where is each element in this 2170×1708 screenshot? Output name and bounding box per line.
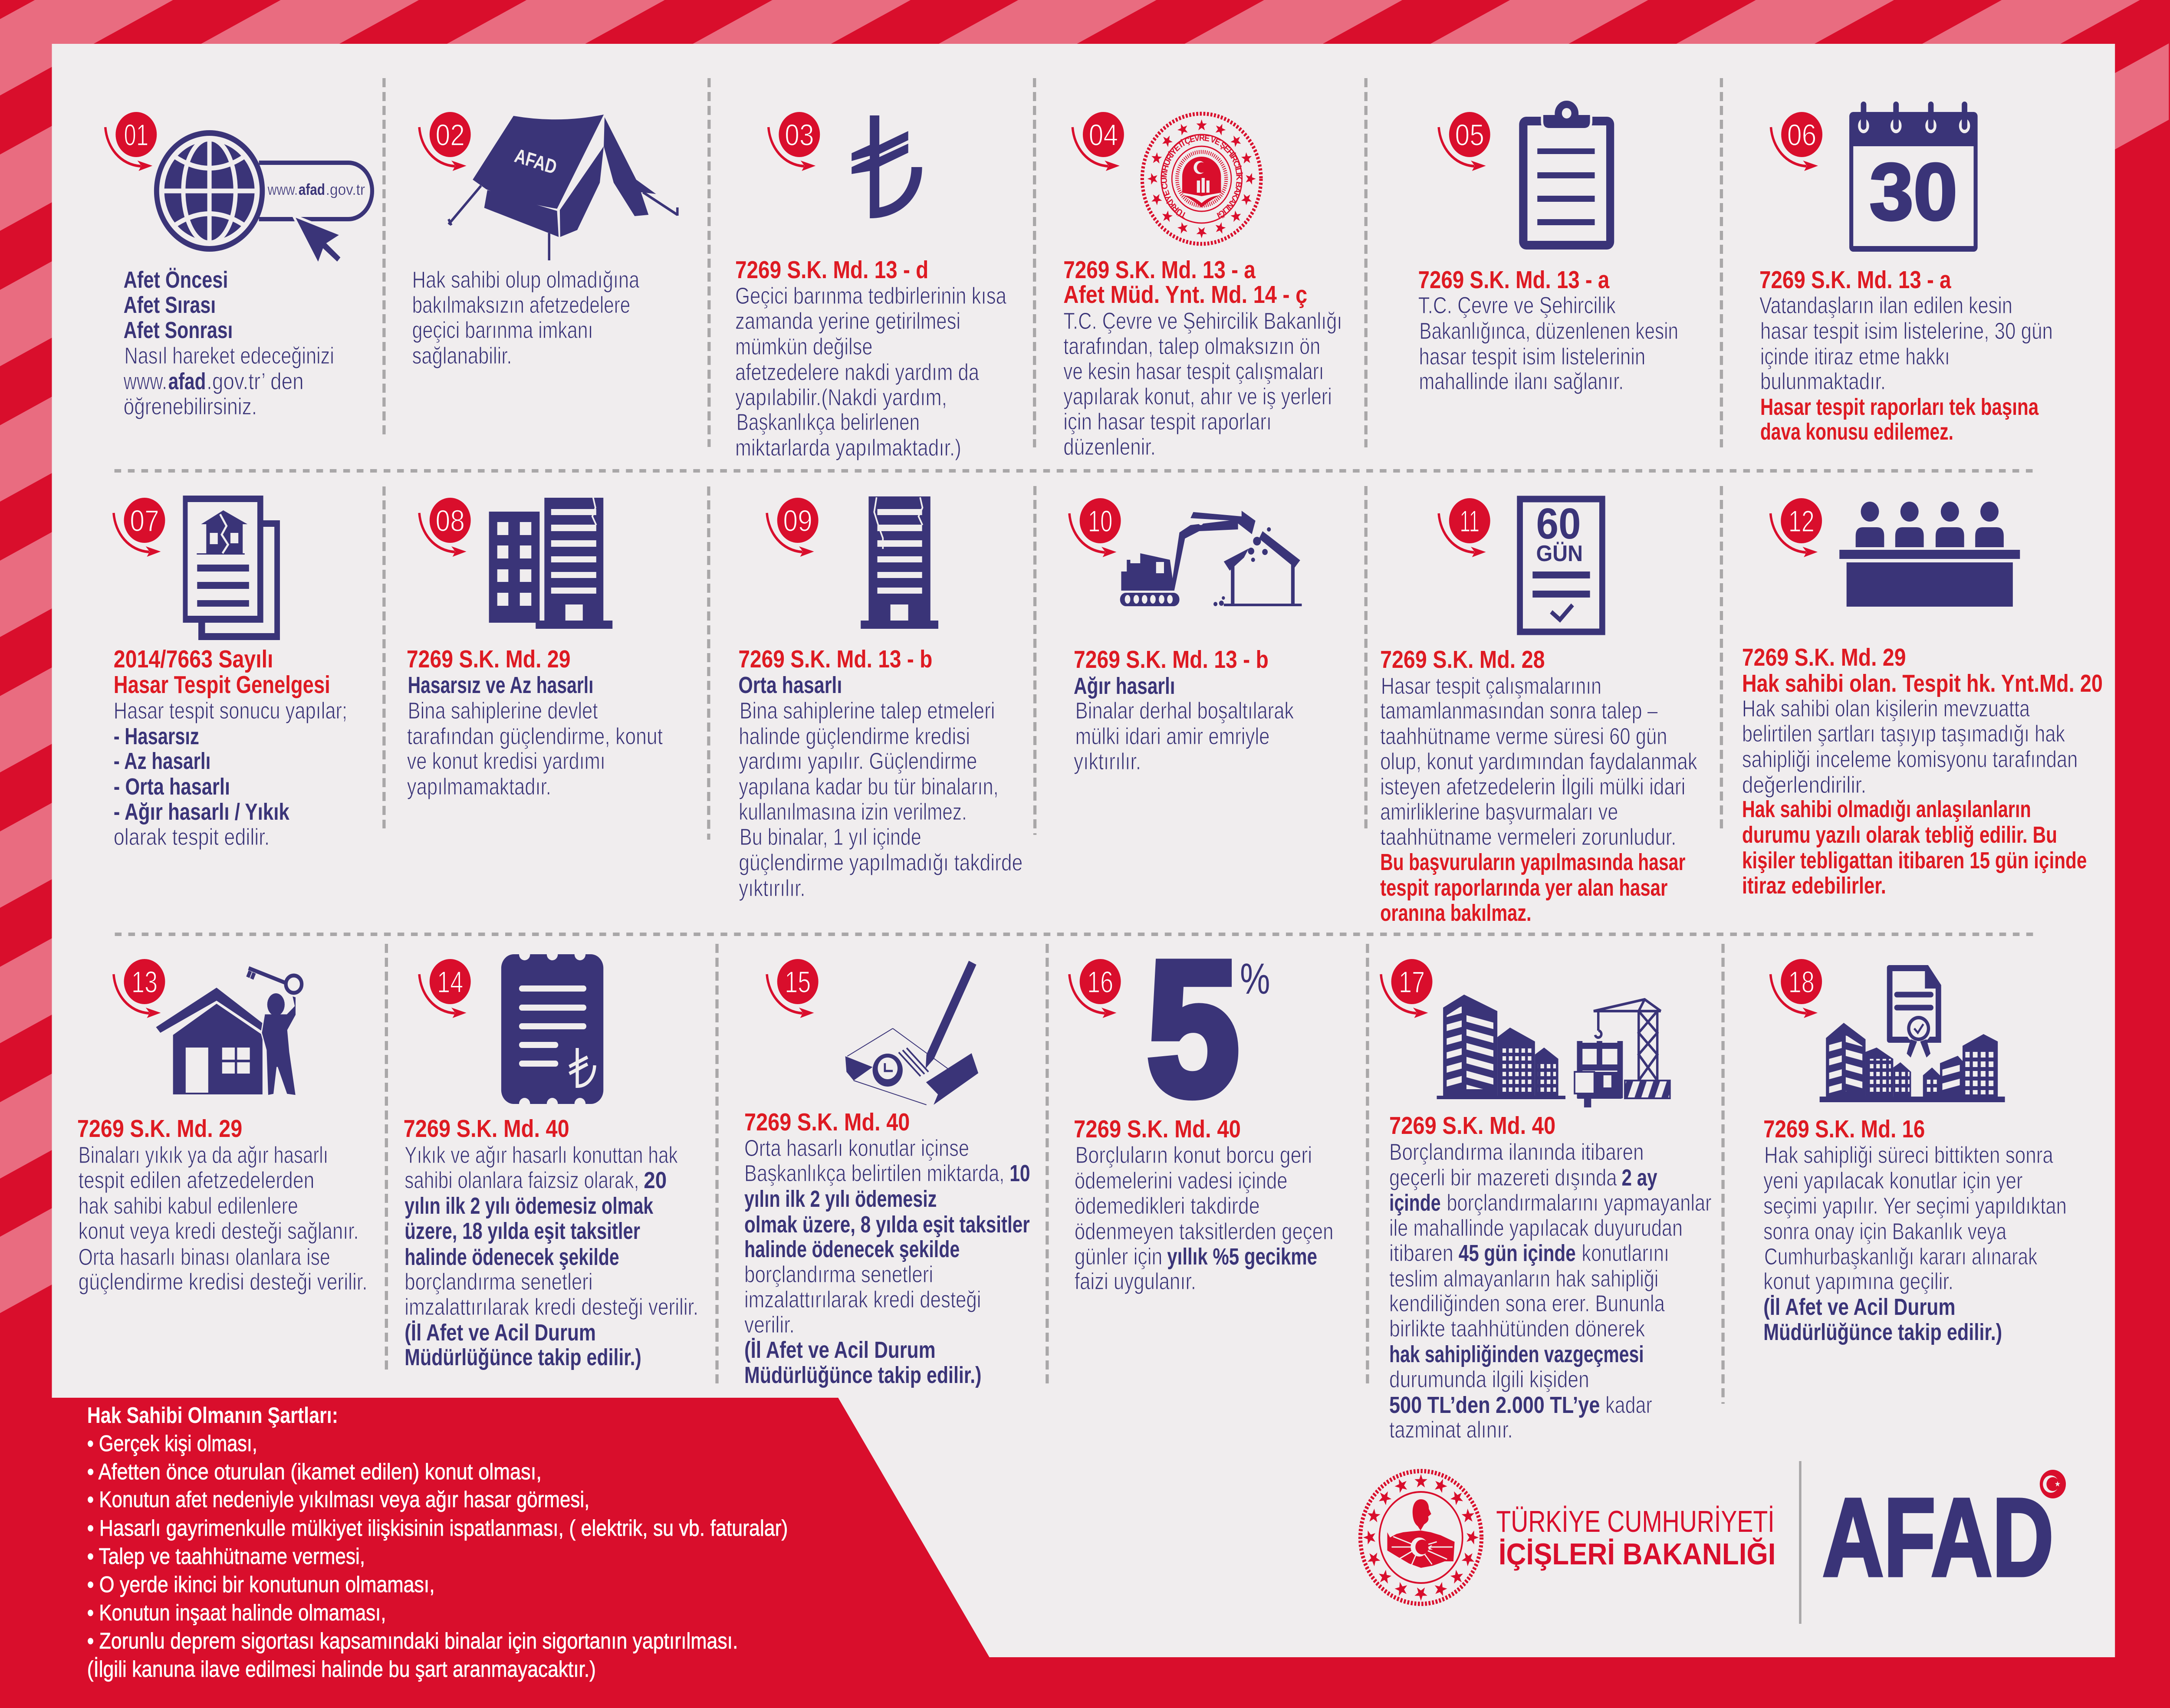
panel 02: temporary shelter — [412, 112, 677, 368]
icon: cracked tower — [861, 496, 938, 629]
text block: kadar — [1605, 1392, 1652, 1418]
text block: hak sahibi kabul edilenlere — [79, 1192, 298, 1219]
icon: approved document over buildings — [1820, 965, 2005, 1102]
text block: faizi uygulanır. — [1075, 1268, 1196, 1294]
text block: sağlanabilir. — [412, 342, 512, 368]
badge 06 — [1771, 112, 1822, 171]
text block: 2 ay — [1622, 1164, 1657, 1190]
text block — [412, 266, 639, 368]
text block: Binaları yıkık ya da ağır hasarlı — [79, 1142, 328, 1168]
text block: yardımı yapılır. Güçlendirme — [739, 748, 977, 774]
text block — [79, 1142, 368, 1294]
text block: miktarlarda yapılmaktadır.) — [735, 434, 961, 460]
panel 08: undamaged and lightly damaged — [407, 496, 663, 799]
text block: Bu binalar, 1 yıl içinde — [740, 824, 921, 850]
text block: hak sahipliğinden vazgeçmesi — [1389, 1341, 1644, 1367]
text block: birlikte taahhütünden dönerek — [1389, 1315, 1645, 1341]
text block: Başkanlıkça belirlenen — [736, 409, 920, 435]
subheading: Orta hasarlı — [738, 672, 842, 698]
icon: clipboard — [1519, 99, 1614, 250]
badge 10 — [1069, 498, 1121, 557]
text block: olmak üzere, 8 yılda eşit taksitler — [744, 1211, 1030, 1237]
badge 03 — [769, 112, 820, 171]
text block: ödenmeyen taksitlerden geçen — [1075, 1218, 1333, 1244]
text block: ile mahallinde yapılacak duyurudan — [1389, 1215, 1683, 1241]
text block: Bina sahiplerine devlet — [408, 697, 598, 723]
conditions list: • Konutun inşaat halinde olmaması, — [87, 1600, 386, 1625]
text block: Müdürlüğünce takip edilir.) — [1763, 1319, 2002, 1345]
heading — [1742, 644, 2103, 697]
text block: (İl Afet ve Acil Durum — [744, 1337, 936, 1363]
icon: 60 days document — [1520, 499, 1602, 632]
text block: yıktırılır. — [739, 875, 806, 901]
text block: Afet Sırası — [124, 292, 216, 318]
text block: Vatandaşların ilan edilen kesin — [1759, 292, 2012, 318]
text block — [1380, 673, 1697, 926]
text block: ödemedikleri takdirde — [1075, 1192, 1260, 1219]
badge 04: 04 — [1089, 118, 1118, 152]
badge 12: 12 — [1789, 504, 1815, 539]
panel 01: AFAD website — [105, 112, 372, 419]
text block: Hak sahibi olmadığı anlaşılanların — [1742, 796, 2031, 822]
text block — [407, 697, 663, 799]
logo text: ministry name: TÜRKİYE CUMHURİYETİ — [1496, 1504, 1775, 1539]
text block: sahibi olanlara faizsiz olarak, — [404, 1167, 639, 1193]
icon: damage report documents — [183, 496, 280, 640]
panel 15: 10 year credit — [744, 959, 1030, 1388]
text block: yılın ilk 2 yılı ödemesiz — [744, 1186, 937, 1212]
icon: buildings and construction crane — [1437, 995, 1670, 1107]
badge 04 — [1072, 112, 1124, 171]
badge 15 — [767, 959, 819, 1018]
badge 08 — [419, 498, 471, 557]
text block: yılın ilk 2 yılı ödemesiz olmak — [404, 1192, 653, 1219]
panel 12: commission evaluation — [1742, 498, 2103, 898]
text block — [735, 282, 1006, 460]
text block — [1389, 1139, 1712, 1442]
heading: 7269 S.K. Md. 40 — [1074, 1115, 1241, 1143]
text block: bakılmaksızın afetzedelere — [412, 292, 630, 318]
logo text: ministry name: İÇİŞLERİ BAKANLIĞI — [1499, 1537, 1775, 1571]
icon: excavator demolishing house — [1120, 511, 1302, 606]
logo: interior ministry seal — [1360, 1471, 1482, 1604]
badge 01 — [105, 112, 157, 171]
text block: teslim almayanların hak sahipliği — [1389, 1265, 1658, 1291]
text block: Hasar tespit sonucu yapılar; — [114, 697, 347, 723]
text block: durumu yazılı olarak tebliğ edilir. Bu — [1742, 821, 2057, 847]
heading: 7269 S.K. Md. 40 — [404, 1115, 569, 1143]
text block: isteyen afetzedelerin İlgili mülki idari — [1380, 773, 1685, 799]
text block: Orta hasarlı konutlar içinse — [744, 1135, 969, 1161]
text block — [1418, 292, 1678, 394]
text block: güçlendirme kredisi desteği verilir. — [79, 1268, 368, 1294]
text block: 45 gün içinde — [1459, 1240, 1576, 1266]
badge 02: 02 — [435, 118, 465, 152]
text block: Afet Sonrası — [124, 317, 233, 343]
text block: yıktırılır. — [1074, 748, 1141, 774]
text block: Hak sahipliği süreci bittikten sonra — [1764, 1142, 2053, 1168]
badge 14: 14 — [437, 965, 463, 999]
heading: 7269 S.K. Md. 29 — [77, 1115, 242, 1143]
text block — [1742, 695, 2087, 898]
text block: tarafından güçlendirme, konut — [407, 723, 663, 749]
text block: değerlendirilir. — [1742, 772, 1866, 798]
icon: tent: AFAD — [513, 145, 559, 179]
panel 10: heavy damage — [1069, 498, 1302, 774]
text block: yapılarak konut, ahır ve iş yerleri — [1063, 383, 1332, 409]
badge 12 — [1771, 498, 1822, 557]
text block: Bina sahiplerine talep etmeleri — [740, 697, 995, 723]
heading: 7269 S.K. Md. 29 — [407, 645, 571, 673]
text block: kişiler tebligattan itibaren 15 gün içinde — [1742, 847, 2087, 873]
panel 14: 20 year credit — [404, 948, 698, 1370]
heading: 7269 S.K. Md. 13 - a — [1759, 266, 1951, 294]
text block: Hak sahibi olup olmadığına — [412, 266, 639, 292]
heading: 7269 S.K. Md. 13 - a — [1418, 266, 1610, 294]
text block: T.C. Çevre ve Şehircilik Bakanlığı — [1063, 308, 1342, 334]
badge 10: 10 — [1088, 504, 1112, 539]
icon: ministry seal: TÜRKİYE CUMHURİYETİ ÇEVRE VE ŞEHİRCİLİK BAKANLIĞI — [1160, 133, 1243, 220]
icon: big 5 percent: % — [1240, 955, 1270, 1003]
text block: Yıkık ve ağır hasarlı konuttan hak — [404, 1142, 678, 1168]
icon: tent — [449, 115, 677, 260]
text block: içinde itiraz etme hakkı — [1760, 343, 1950, 369]
text block: 10 — [1009, 1160, 1030, 1186]
text block: ve konut kredisi yardımı — [407, 748, 605, 774]
heading: 7269 S.K. Md. 40 — [1389, 1112, 1555, 1140]
text block: Nasıl hareket edeceğinizi — [124, 342, 334, 368]
badge 05 — [1439, 112, 1490, 171]
text block: kullanılmasına izin verilmez. — [739, 798, 967, 824]
conditions list: • Hasarlı gayrimenkulle mülkiyet ilişkisinin ispatlanması, ( elektrik, su vb. faturalar) — [87, 1515, 788, 1540]
text block: Müdürlüğünce takip edilir.) — [404, 1344, 641, 1370]
badge 14 — [419, 959, 471, 1018]
text block: - Hasarsız — [114, 723, 199, 749]
badge 08: 08 — [435, 504, 465, 538]
conditions list: • Gerçek kişi olması, — [87, 1431, 257, 1456]
panel 13: rightful owners — [77, 959, 368, 1294]
text block: Afet Öncesi — [124, 266, 228, 292]
text block: (İl Afet ve Acil Durum — [404, 1319, 596, 1345]
text block: tespit edilen afetzedelerden — [79, 1167, 314, 1193]
text block: dava konusu edilemez. — [1760, 418, 1953, 444]
panel 05: list publication — [1418, 99, 1678, 394]
text block — [123, 266, 334, 419]
heading — [114, 645, 330, 699]
conditions list: • Talep ve taahhütname vermesi, — [87, 1544, 365, 1569]
text block: Hasar tespit raporları tek başına — [1760, 394, 2039, 420]
badge 06: 06 — [1787, 118, 1816, 152]
text block: 500 TL’den 2.000 TL’ye — [1389, 1392, 1600, 1418]
logo: AFAD: AFAD — [1822, 1475, 2054, 1599]
text block: Başkanlıkça belirtilen miktarda, — [744, 1160, 1004, 1186]
heading: 7269 S.K. Md. 29 — [1742, 644, 1906, 671]
text block: borçlandırmalarını yapmayanlar — [1447, 1189, 1712, 1215]
heading: 7269 S.K. Md. 13 - b — [738, 645, 932, 673]
text block: - Orta hasarlı — [114, 773, 230, 799]
badge 02 — [419, 112, 471, 171]
text block: bulunmaktadır. — [1760, 368, 1886, 394]
conditions list: • Zorunlu deprem sigortası kapsamındaki binalar için sigortanın yaptırılması. — [87, 1628, 738, 1653]
heading: 7269 S.K. Md. 40 — [744, 1108, 910, 1136]
text block: halinde güçlendirme kredisi — [739, 723, 970, 749]
text block: afetzedelere nakdi yardım da — [735, 359, 979, 385]
text block: taahhütname verme süresi 60 gün — [1380, 723, 1667, 749]
text block: amirliklerine başvurmaları ve — [1380, 798, 1618, 824]
text block: geçerli bir mazereti dışında — [1389, 1164, 1617, 1190]
icon: lira sign — [852, 115, 922, 218]
text block — [114, 697, 347, 850]
text block: Orta hasarlı binası olanlara ise — [79, 1244, 330, 1270]
badge 13: 13 — [132, 965, 158, 999]
text block: Borçluların konut borcu geri — [1075, 1142, 1312, 1168]
text block: mahallinde ilanı sağlanır. — [1419, 368, 1624, 394]
text block: Bu başvuruların yapılmasında hasar — [1380, 849, 1685, 875]
text block: konut yapımına geçilir. — [1763, 1268, 1953, 1294]
text block: olup, konut yardımından faydalanmak — [1380, 748, 1697, 774]
heading: Afet Müd. Ynt. Md. 14 - ç — [1063, 281, 1307, 309]
text block: ve kesin hasar tespit çalışmaları — [1063, 358, 1324, 384]
text block: Cumhurbaşkanlığı kararı alınarak — [1764, 1243, 2038, 1269]
text block: oranına bakılmaz. — [1380, 900, 1532, 926]
text block: yıllık %5 gecikme — [1167, 1243, 1317, 1269]
text block: kendiliğinden sona erer. Bununla — [1389, 1290, 1665, 1316]
panel 11: 60 day commitment — [1380, 498, 1697, 926]
text block: halinde ödenecek şekilde — [404, 1244, 619, 1270]
conditions list: • O yerde ikinci bir konutunun olmaması, — [87, 1572, 435, 1597]
text block: Hasar tespit çalışmalarının — [1381, 673, 1601, 699]
icon: globe with address bar and cursor: .gov.tr — [326, 181, 365, 198]
text block: durumunda ilgili kişiden — [1389, 1366, 1589, 1392]
text block: itiraz edebilirler. — [1742, 872, 1886, 898]
badge 13 — [114, 959, 165, 1018]
text block: - Az hasarlı — [114, 748, 210, 774]
text block — [744, 1135, 1030, 1388]
text block: ödemelerini vadesi içinde — [1075, 1167, 1288, 1193]
conditions list: (İlgili kanuna ilave edilmesi halinde bu şart aranmayacaktır.) — [87, 1656, 596, 1682]
heading: 7269 S.K. Md. 13 - a — [1063, 256, 1256, 284]
badge 17: 17 — [1399, 965, 1425, 999]
text block — [404, 1142, 698, 1370]
text block: Müdürlüğünce takip edilir.) — [744, 1362, 981, 1388]
panel 03: cash aid — [735, 112, 1006, 460]
conditions list: • Afetten önce oturulan (ikamet edilen) konut olması, — [87, 1459, 542, 1484]
heading — [1063, 256, 1307, 309]
text block — [739, 697, 1023, 901]
text block — [1763, 1142, 2067, 1345]
badge 09: 09 — [783, 504, 812, 538]
badge 05: 05 — [1455, 118, 1484, 152]
text block: üzere, 18 yılda eşit taksitler — [404, 1218, 640, 1244]
text block: 20 — [644, 1167, 667, 1193]
icon: 60 days document: GÜN — [1536, 541, 1583, 566]
text block: tarafından, talep olmaksızın ön — [1063, 333, 1320, 359]
text block: tespit raporlarında yer alan hasar — [1380, 874, 1667, 900]
panel: conditions for being a rightful owner — [87, 1403, 788, 1682]
text block: mülki idari amir emriyle — [1075, 723, 1270, 749]
text block: - Ağır hasarlı / Yıkık — [114, 798, 289, 824]
panel 06: objection right — [1759, 105, 2053, 444]
text block: Hak sahibi olan kişilerin mevzuatta — [1742, 695, 2030, 721]
text block: tamamlanmasından sonra talep – — [1380, 697, 1658, 723]
heading: Hak sahibi olan. Tespit hk. Ynt.Md. 20 — [1742, 670, 2103, 697]
subheading: Hasarsız ve Az hasarlı — [408, 672, 593, 698]
badge 07 — [114, 498, 165, 557]
heading: 7269 S.K. Md. 13 - d — [735, 256, 928, 284]
text block: sahipliği inceleme komisyonu tarafından — [1742, 746, 2078, 772]
icon: commission at table — [1839, 502, 2020, 607]
text block: Geçici barınma tedbirlerinin kısa — [735, 282, 1006, 309]
text block: olarak tespit edilir. — [114, 824, 270, 850]
text block: taahhütname vermeleri zorunludur. — [1380, 824, 1676, 850]
conditions heading: Hak Sahibi Olmanın Şartları: — [87, 1403, 338, 1428]
badge 09 — [767, 498, 819, 557]
text block: konut veya kredi desteği sağlanır. — [79, 1218, 358, 1244]
text block: Borçlandırma ilanında itibaren — [1389, 1139, 1644, 1165]
badge 03: 03 — [785, 118, 814, 152]
text block: T.C. Çevre ve Şehircilik — [1418, 292, 1616, 318]
text block: Bakanlığınca, düzenlenen kesin — [1419, 318, 1678, 344]
text block: belirtilen şartları taşıyıp taşımadığı hak — [1742, 720, 2065, 746]
badge 18 — [1771, 959, 1822, 1018]
text block: düzenlenir. — [1063, 434, 1156, 460]
text block: hasar tespit isim listelerinin — [1419, 343, 1645, 369]
text block — [1759, 292, 2053, 444]
icon: house, person and key — [156, 968, 302, 1096]
text block: verilir. — [744, 1311, 795, 1337]
badge 01: 01 — [124, 118, 148, 152]
text block: afad — [168, 368, 206, 394]
text block: mümkün değilse — [735, 333, 873, 359]
icon: calendar 30 — [1849, 105, 1978, 252]
text block: yeni yapılacak konutlar için yer — [1763, 1167, 2023, 1193]
text block: sonra onay için Bakanlık veya — [1763, 1218, 2006, 1244]
icon: pen and promissory note — [845, 961, 978, 1105]
heading: 7269 S.K. Md. 16 — [1763, 1115, 1925, 1143]
text block: hasar tespit isim listelerine, 30 gün — [1760, 318, 2053, 344]
text block: yapılana kadar bu tür binaların, — [739, 773, 999, 799]
text block: (İl Afet ve Acil Durum — [1763, 1294, 1956, 1320]
text block: öğrenebilirsiniz. — [124, 393, 257, 419]
panel 17: delivery deadlines — [1381, 959, 1712, 1442]
icon: 60 days document: 60 — [1536, 499, 1581, 548]
panel 09: medium damage — [738, 496, 1023, 901]
text block: seçimi yapılır. Yer seçimi yapıldıktan — [1763, 1192, 2067, 1219]
badge 15: 15 — [785, 965, 811, 999]
icon: globe with address bar and cursor: www. — [267, 181, 298, 198]
panel 07: damage report categories — [114, 496, 347, 850]
badge 11 — [1439, 498, 1490, 557]
icon: globe with address bar and cursor: afad — [299, 181, 325, 198]
text block: Binalar derhal boşaltılarak — [1075, 697, 1294, 723]
badge 17 — [1381, 959, 1432, 1018]
icon: big 5 percent: 5 — [1147, 922, 1239, 1135]
icon: globe with address bar and cursor — [154, 130, 372, 265]
text block: borçlandırma senetleri — [744, 1261, 933, 1287]
subheading: Ağır hasarlı — [1074, 673, 1175, 699]
text block: içinde — [1389, 1189, 1441, 1215]
conditions list: • Konutun afet nedeniyle yıkılması veya ağır hasar görmesi, — [87, 1487, 589, 1512]
heading: 7269 S.K. Md. 13 - b — [1074, 646, 1269, 673]
logo text: ministry name — [1496, 1504, 1775, 1571]
text block: itibaren — [1389, 1240, 1453, 1266]
icon: calendar 30: 30 — [1870, 147, 1957, 237]
badge 16: 16 — [1087, 965, 1113, 999]
text block: yapılabilir.(Nakdi yardım, — [735, 384, 947, 410]
icon: buildings with crack — [489, 496, 612, 629]
text block: .gov.tr’ den — [207, 368, 304, 394]
text block: halinde ödenecek şekilde — [744, 1236, 960, 1262]
panel 04: ministry damage assessment — [1063, 112, 1342, 460]
badge 11: 11 — [1460, 504, 1480, 539]
text block — [1063, 308, 1342, 460]
panel 16: 5 percent late interest — [1069, 922, 1333, 1294]
conditions list — [87, 1431, 788, 1682]
text block: borçlandırma senetleri — [404, 1268, 593, 1294]
text block: zamanda yerine getirilmesi — [735, 308, 960, 334]
icon: ministry seal — [1142, 114, 1261, 244]
badge 07: 07 — [130, 504, 159, 538]
icon: lira receipt — [501, 948, 603, 1110]
badge 18: 18 — [1789, 965, 1815, 999]
text block: imzalattırılarak kredi desteği verilir. — [404, 1294, 698, 1320]
badge 16 — [1069, 959, 1121, 1018]
text block: imzalattırılarak kredi desteği — [744, 1286, 981, 1312]
heading: 2014/7663 Sayılı — [114, 645, 273, 673]
text block: güçlendirme yapılmadığı takdirde — [739, 849, 1023, 875]
text block: için hasar tespit raporları — [1063, 408, 1272, 434]
heading: Hasar Tespit Genelgesi — [114, 671, 330, 699]
text block: yapılmamaktadır. — [407, 773, 551, 799]
text block — [1074, 697, 1294, 774]
heading: 7269 S.K. Md. 28 — [1380, 646, 1545, 673]
text block: konutlarını — [1581, 1240, 1669, 1266]
text block: tazminat alınır. — [1389, 1416, 1513, 1442]
text block: www. — [123, 368, 167, 394]
panel 18: site selection — [1763, 959, 2067, 1345]
text block: günler için — [1075, 1243, 1162, 1269]
text block: geçici barınma imkanı — [412, 317, 593, 343]
text block — [1075, 1142, 1333, 1294]
